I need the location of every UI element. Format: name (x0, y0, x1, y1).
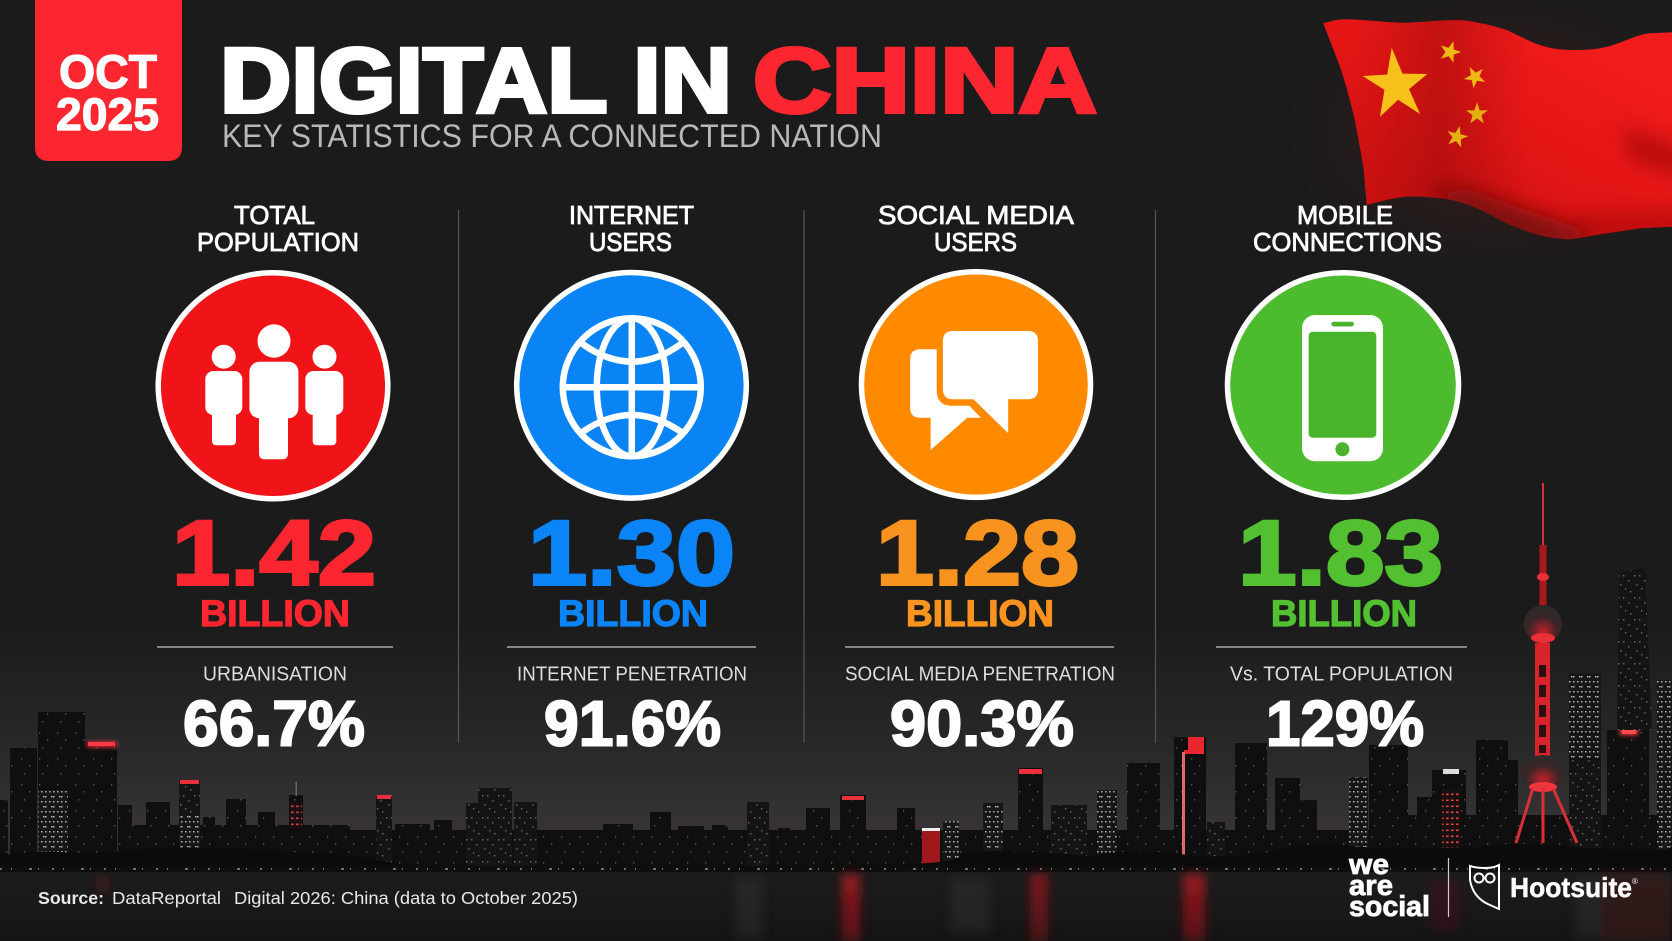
logo: hootsuite owl (1470, 865, 1499, 909)
column dividers (458, 210, 1156, 743)
flag of China (1320, 15, 1672, 250)
heading: USERS (589, 227, 672, 257)
icon: globe (517, 272, 746, 498)
unit: BILLION (906, 593, 1054, 634)
title: DIGITAL IN (220, 30, 732, 132)
unit: BILLION (200, 593, 350, 634)
heading: MOBILE (1297, 200, 1393, 230)
icon: phone (1228, 273, 1458, 497)
red-lit buildings (85, 725, 1649, 870)
logo: we are social (1348, 849, 1430, 923)
heading (197, 200, 359, 257)
panel: total population (157, 200, 393, 760)
heading: POPULATION (197, 227, 359, 257)
big number: 1.42 (172, 502, 376, 604)
heading (569, 200, 694, 257)
shoreline lights (0, 868, 1672, 870)
logo: we are social: are (1349, 870, 1393, 902)
logo: hootsuite wordmark: ® (1632, 877, 1638, 886)
heading (878, 200, 1075, 257)
subtitle: KEY STATISTICS FOR A CONNECTED NATION (222, 118, 882, 154)
TV tower (1516, 483, 1577, 843)
sub-label: SOCIAL MEDIA PENETRATION (845, 664, 1115, 686)
percentage: 91.6% (544, 688, 721, 760)
logo: we are social: we (1348, 849, 1389, 881)
flag glow (1240, 0, 1672, 290)
source note: DataReportal (112, 888, 221, 908)
big number: 1.83 (1238, 502, 1443, 604)
title: CHINA (753, 30, 1097, 132)
heading: USERS (934, 227, 1017, 257)
sub-label: INTERNET PENETRATION (517, 664, 747, 686)
unit: BILLION (1271, 593, 1417, 634)
left buildings (0, 712, 1518, 870)
big number: 1.28 (876, 502, 1079, 604)
date badge: OCT (59, 45, 157, 98)
flag stars (1363, 48, 1427, 117)
background buildings silhouette (120, 815, 1672, 870)
title (220, 30, 1097, 132)
source note (38, 888, 578, 908)
logo: hootsuite wordmark: Hootsuite (1510, 872, 1632, 903)
date badge: 2025 (56, 89, 159, 140)
panel: internet users (507, 200, 756, 760)
panel: mobile connections (1216, 200, 1467, 760)
percentage: 66.7% (183, 688, 365, 760)
panel: social media users (845, 200, 1115, 760)
heading: CONNECTIONS (1253, 227, 1442, 257)
big number: 1.30 (528, 502, 735, 604)
shanghai tower (1617, 567, 1652, 730)
icon: people (158, 273, 388, 499)
sub-label: Vs. TOTAL POPULATION (1230, 664, 1453, 686)
heading (1253, 200, 1442, 257)
percentage: 129% (1266, 688, 1424, 760)
river with reflections (0, 872, 1672, 941)
unit: BILLION (558, 593, 708, 634)
sub-label: URBANISATION (203, 664, 347, 686)
heading: TOTAL (234, 200, 315, 230)
heading: SOCIAL MEDIA (878, 200, 1075, 230)
icon: chat bubbles (862, 272, 1090, 497)
logo: we are social: social (1349, 891, 1430, 923)
heading: INTERNET (569, 200, 694, 230)
tree line (0, 843, 1672, 880)
skyline backdrop and city (0, 483, 1672, 880)
date badge (35, 0, 182, 161)
source note: Source: (38, 888, 104, 908)
percentage: 90.3% (890, 688, 1074, 760)
source note: Digital 2026: China (data to October 2025) (234, 888, 578, 908)
